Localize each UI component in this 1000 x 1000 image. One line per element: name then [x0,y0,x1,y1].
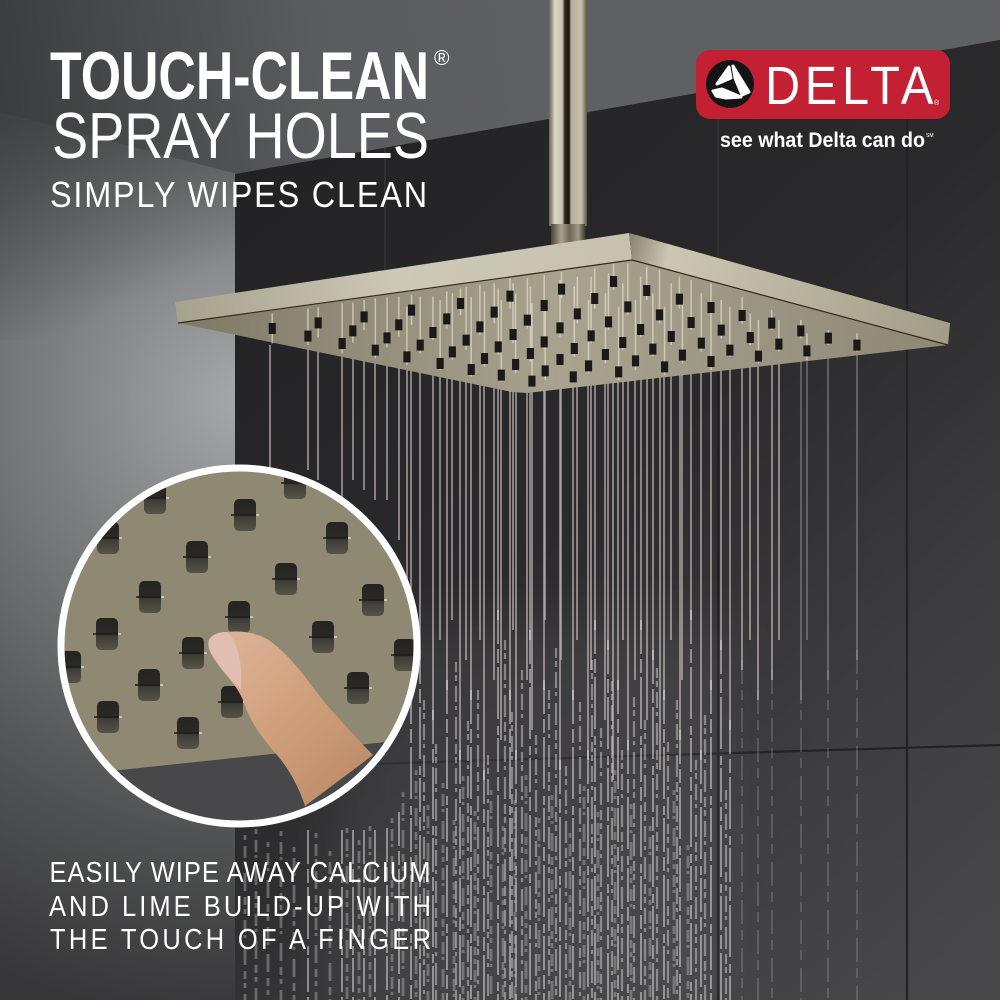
shower head left face [175,233,632,323]
magnified circle callout [56,467,420,830]
tagline: SM [926,133,934,139]
body text [49,855,431,955]
water streams [245,345,857,1000]
tagline: see what Delta can do [720,129,925,152]
icon: delta triangle [706,60,754,108]
background: dark tile wall [235,40,1000,1000]
registered mark: ® [934,99,940,107]
magnified plate surface [56,467,420,830]
body text: THE TOUCH OF A FINGER [50,922,431,955]
finger [208,632,373,806]
subtitle: SIMPLY WIPES CLEAN [50,175,427,215]
title: Touch-Clean: TOUCH-CLEAN [50,38,429,114]
spray holes close-up [56,467,419,749]
shower head right face [629,233,950,345]
background: upper ceiling area [0,0,1000,174]
shower head edge lines [178,233,950,345]
shower arm pipe [549,0,587,248]
body text: AND LIME BUILD-UP WITH [49,889,431,922]
title: Touch-Clean: ® [434,47,450,70]
title: Spray Holes: SPRAY HOLES [52,99,429,172]
water haze [330,620,730,1000]
shower head underside with spray holes [178,260,948,393]
Delta logo [696,50,950,119]
shower head [175,233,950,393]
wordmark: DELTA [765,55,934,116]
fingernail [208,632,241,690]
body text: EASILY WIPE AWAY CALCIUM [50,855,431,888]
plate edge shadow [117,742,384,820]
white ring [61,468,417,824]
